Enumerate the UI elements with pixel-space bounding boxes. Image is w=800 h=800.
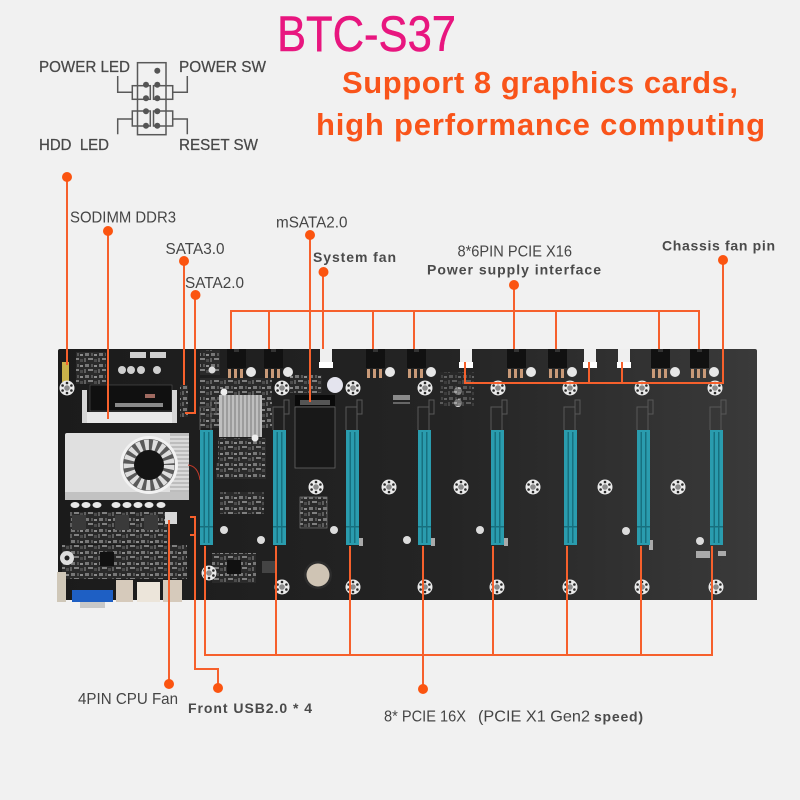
board [58, 349, 757, 600]
headline: Support 8 graphics cards, [342, 65, 738, 100]
callout: SODIMM DDR3: SODIMM DDR3 [70, 210, 176, 226]
PCIe slots [200, 400, 726, 545]
callout: PCIe 16X: (PCIE X1 Gen2 [478, 708, 590, 726]
coin battery [304, 561, 332, 589]
callout: mSATA2.0: mSATA2.0 [276, 214, 348, 232]
callout: PCIe 16X [384, 684, 643, 726]
leader lines: power connectors [231, 311, 699, 349]
headline: high performance computing [316, 107, 765, 142]
leader lines: chassis fan [465, 260, 723, 383]
callout: 4PIN CPU fan: 4PIN CPU Fan [78, 691, 178, 708]
callout: mSATA2.0 [276, 214, 348, 402]
callout: system fan: System fan [313, 249, 396, 265]
callout: front USB [188, 517, 312, 716]
callout: HDD LED header [62, 172, 72, 365]
leader lines: PCIe slots [205, 546, 712, 689]
callout: SATA2.0: SATA2.0 [185, 275, 244, 292]
callout: SATA3.0 [166, 241, 225, 385]
callout: 8*6PIN PCIE X16 power [427, 244, 601, 349]
callout: PCIe 16X: 8* PCIE 16X [384, 708, 466, 726]
title: BTC-S37 [277, 6, 456, 62]
component clusters [60, 350, 726, 583]
callout: SODIMM DDR3 [70, 210, 176, 419]
front panel header diagram: POWER SW [179, 59, 267, 76]
callout: front USB: Front USB2.0 * 4 [188, 700, 312, 716]
front panel header diagram: RESET SW [179, 137, 259, 154]
callout: SATA2.0 [185, 275, 244, 413]
motherboard [57, 349, 757, 608]
small parts near slot ends [220, 526, 704, 545]
callout: SATA3.0: SATA3.0 [166, 241, 225, 258]
power connectors [227, 349, 719, 378]
callout: chassis fan pin [662, 238, 775, 265]
fan headers [319, 349, 631, 368]
chipset heatsink [219, 388, 262, 442]
front panel header diagram: HDD LED [39, 137, 109, 154]
headline [316, 65, 765, 142]
callout: 4PIN CPU fan [78, 520, 178, 708]
callout: chassis fan pin: Chassis fan pin [662, 238, 775, 254]
SODIMM socket [82, 390, 177, 423]
callout: 8*6PIN PCIE X16 power: 8*6PIN PCIE X16 [458, 244, 572, 260]
mounting screws [60, 380, 724, 594]
CPU heatsink and fan [65, 433, 200, 500]
callout: 8*6PIN PCIE X16 power: Power supply interface [427, 262, 601, 278]
callout: PCIe 16X: speed) [594, 708, 643, 724]
front panel header diagram: POWER LED [39, 59, 130, 76]
rear IO ports [57, 572, 182, 608]
callout: system fan [313, 249, 396, 349]
front panel header diagram [39, 59, 267, 154]
